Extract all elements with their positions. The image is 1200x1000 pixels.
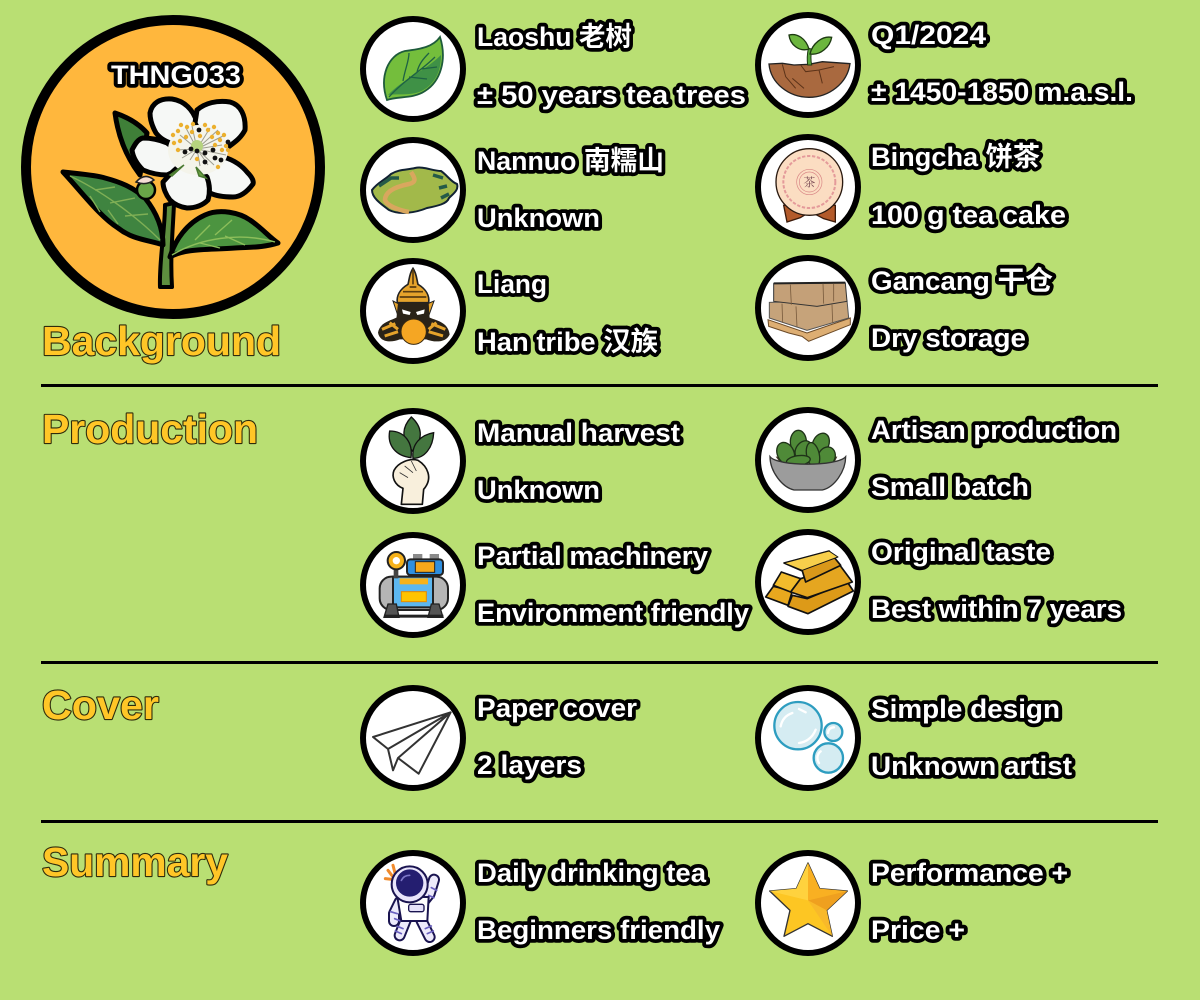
icon: astronaut [363, 853, 463, 953]
text: dry storage: Dry storage [871, 323, 1026, 353]
item: shape [758, 137, 1066, 237]
badge code: THNG033 [111, 60, 241, 90]
text: date: Q1/2024 [871, 20, 986, 50]
text: artisan production: Artisan production [871, 415, 1117, 445]
text: manual harvest: Manual harvest [477, 418, 680, 448]
icon: tea cake [758, 137, 858, 237]
item: origin [363, 140, 664, 240]
text: best within: Best within 7 years [871, 594, 1122, 624]
text: Nannuo: Nannuo 南糯山 [477, 146, 664, 176]
item: taste [758, 532, 1122, 632]
icon: guardian figure [363, 261, 463, 361]
text: small batch: Small batch [871, 472, 1029, 502]
item: harvest [363, 411, 680, 511]
icon: star [758, 853, 858, 953]
icon: pallet of boxes [758, 258, 858, 358]
item: harvest date [758, 15, 1133, 115]
text: Liang: Liang [477, 269, 547, 299]
heading: Summary: Summary [42, 839, 228, 885]
text: unknown: Unknown [477, 475, 600, 505]
icon: hand holding leaves [363, 411, 463, 511]
item: maker [363, 261, 658, 361]
icon: gold bars [758, 532, 858, 632]
icon: machine [363, 535, 463, 635]
icon: bowl of leaves [758, 410, 858, 510]
icon: mountain map [363, 140, 463, 240]
item: design [758, 688, 1072, 788]
item: tree age [363, 19, 746, 119]
item: artisan [758, 410, 1117, 510]
item: storage [758, 258, 1053, 358]
badge: tea flower with code THNG033 [26, 20, 320, 314]
text: beginners friendly: Beginners friendly [477, 915, 720, 945]
text: Bingcha: Bingcha 饼茶 [871, 142, 1040, 172]
text: partial machinery: Partial machinery [477, 541, 708, 571]
text: tribe: Han tribe 汉族 [477, 327, 658, 357]
text: simple design: Simple design [871, 694, 1060, 724]
text: unknown: Unknown [477, 203, 600, 233]
icon: bubbles [758, 688, 858, 788]
icon: tea cake: 茶 [803, 173, 815, 190]
icon: sprout in soil [758, 15, 858, 115]
text: years: ± 50 years tea trees [477, 80, 746, 110]
icon: leaf [363, 19, 463, 119]
text: price: Price + [871, 915, 965, 945]
text: original taste: Original taste [871, 537, 1051, 567]
icon: paper plane [363, 688, 463, 788]
text: environment friendly: Environment friendly [477, 598, 749, 628]
text: Gancang: Gancang 干仓 [871, 266, 1053, 296]
heading: Production: Production [42, 406, 258, 452]
text: paper cover: Paper cover [477, 693, 638, 723]
item: daily drinking [363, 853, 720, 953]
heading: Cover: Cover [42, 682, 159, 728]
text: daily drinking tea: Daily drinking tea [477, 858, 707, 888]
text: layers: 2 layers [477, 750, 582, 780]
illustration: tea flower [63, 99, 278, 287]
text: weight: 100 g tea cake [871, 200, 1066, 230]
text: unknown artist: Unknown artist [871, 751, 1072, 781]
text: performance: Performance + [871, 858, 1068, 888]
item: machinery [363, 535, 749, 635]
item: performance and price [758, 853, 1068, 953]
heading: Background: Background [42, 318, 281, 364]
item: paper [363, 688, 638, 788]
text: Laoshu: Laoshu 老树 [477, 22, 632, 52]
text: altitude: ± 1450-1850 m.a.s.l. [871, 77, 1133, 107]
